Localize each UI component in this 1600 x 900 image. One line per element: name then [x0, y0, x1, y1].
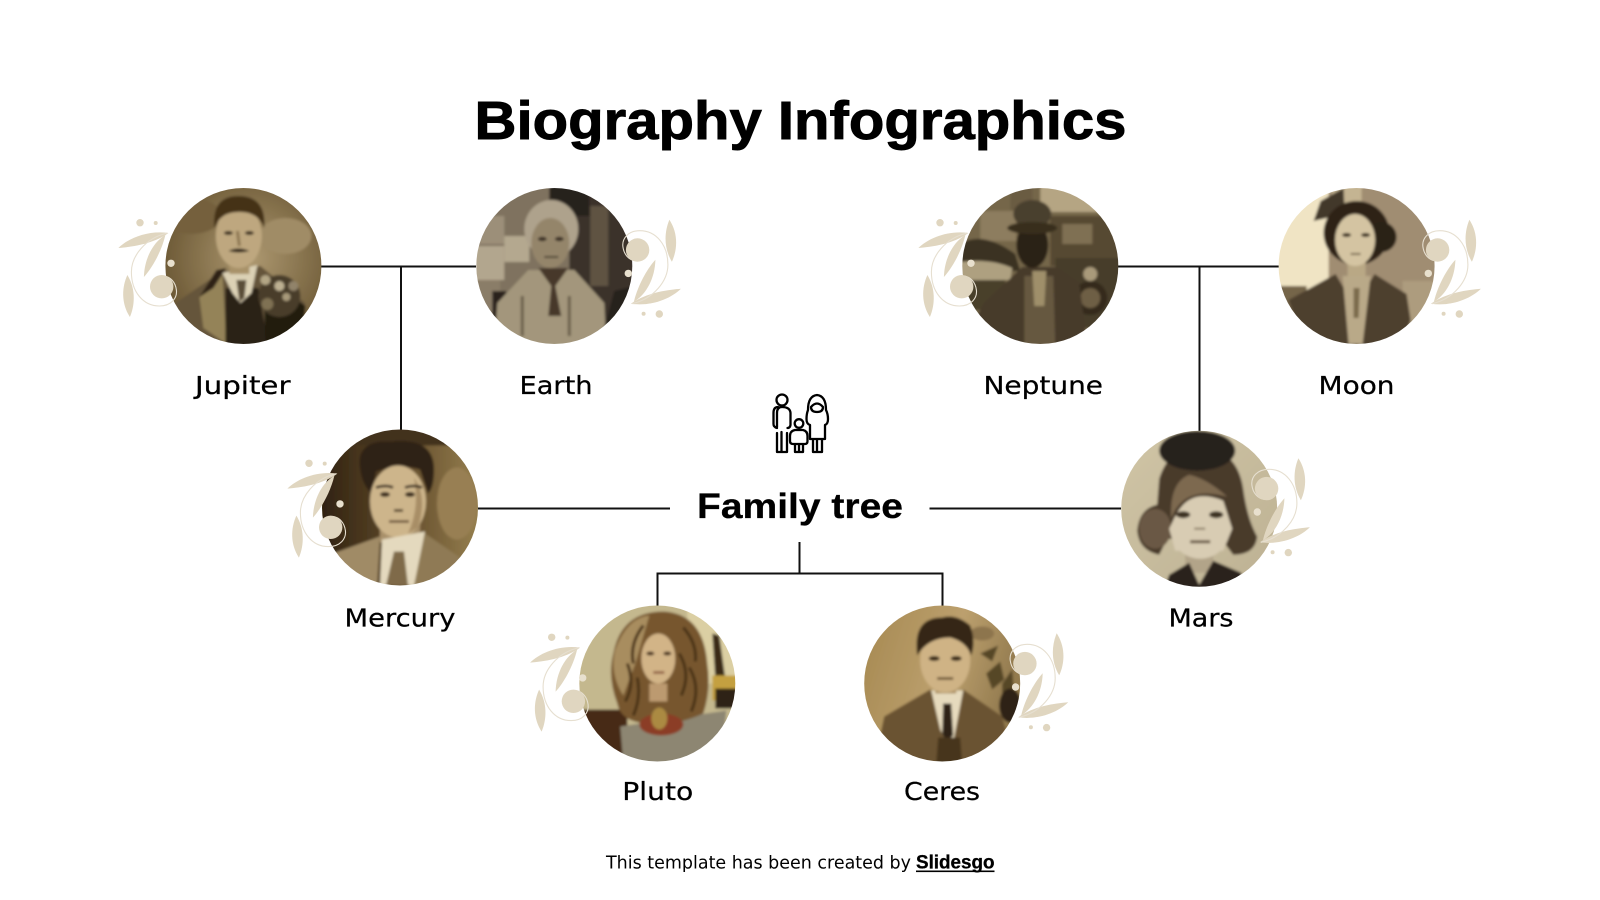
- person: Moon: [1277, 186, 1481, 400]
- name label: Mercury: [344, 604, 456, 633]
- icon: family: [774, 394, 828, 452]
- person: Mercury: [287, 428, 480, 633]
- footer credit: Slidesgo: [916, 852, 994, 873]
- name label: Mars: [1168, 604, 1234, 633]
- person: Earth: [474, 186, 681, 400]
- connector: Family tree to Pluto and Ceres: [658, 542, 942, 606]
- person: Jupiter: [118, 186, 323, 400]
- portrait: Ceres: [862, 604, 1022, 764]
- connector: Mercury to Family tree: [478, 508, 670, 510]
- connector: Family tree to Mars: [930, 508, 1121, 510]
- person: Mars: [1119, 429, 1310, 633]
- floral ornament: [287, 460, 346, 558]
- portrait: Neptune: [960, 186, 1120, 346]
- name label: Jupiter: [193, 371, 291, 400]
- footer credit: This template has been created by: [605, 852, 911, 873]
- portrait: Jupiter: [161, 186, 323, 346]
- portrait: Earth: [474, 186, 634, 346]
- floral ornament: [1010, 633, 1068, 731]
- name label: Moon: [1318, 371, 1394, 400]
- floral ornament: [1252, 458, 1310, 556]
- portrait: Moon: [1277, 186, 1437, 346]
- name label: Pluto: [622, 777, 693, 806]
- family tree infographic: [118, 100, 1481, 873]
- heading: Family tree: Family tree: [697, 487, 903, 526]
- floral ornament: [918, 219, 977, 317]
- floral ornament: [530, 634, 588, 732]
- floral ornament: [623, 220, 681, 318]
- portrait: Mercury: [320, 428, 480, 588]
- portrait: Mars: [1119, 429, 1279, 589]
- name label: Earth: [520, 371, 592, 400]
- title: Biography Infographics: [474, 91, 1126, 151]
- name label: Neptune: [984, 371, 1103, 400]
- person: Pluto: [530, 604, 737, 806]
- person: Neptune: [918, 186, 1120, 400]
- floral ornament: [118, 219, 177, 317]
- connector: Jupiter, Earth and Mercury: [321, 266, 476, 430]
- portrait: Pluto: [577, 604, 737, 764]
- person: Ceres: [862, 604, 1068, 806]
- name label: Ceres: [904, 777, 980, 806]
- connector: Neptune, Moon and Mars: [1118, 266, 1279, 431]
- floral ornament: [1423, 220, 1481, 318]
